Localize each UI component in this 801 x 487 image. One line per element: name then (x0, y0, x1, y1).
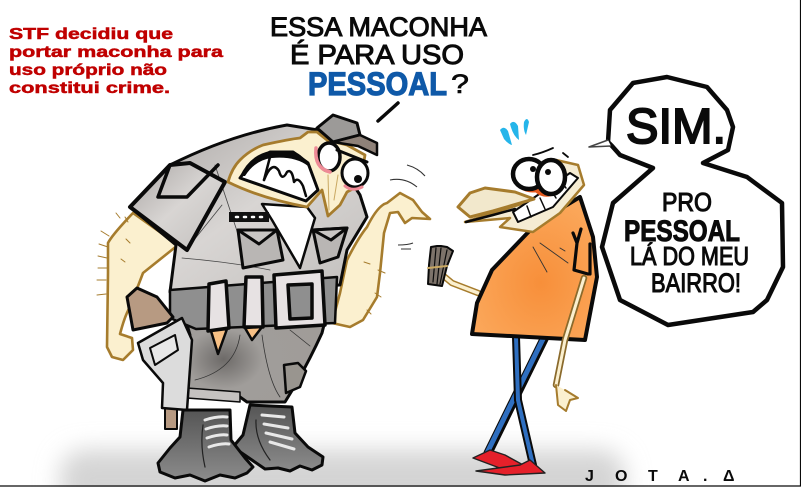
officer shirt (130, 125, 367, 292)
bundle of joints (428, 246, 453, 286)
right arm (556, 278, 584, 411)
officer right arm and pointing hand (332, 193, 430, 327)
caption: red headline: constitui crime. (9, 80, 170, 97)
speech bubble: answer (589, 77, 783, 325)
caption: red headline: STF decidiu que (9, 26, 173, 43)
speech: officer question: ESSA MACONHA (270, 12, 487, 42)
motion lines (390, 165, 425, 249)
caption: red headline: uso próprio não (9, 62, 167, 79)
bubble text: PESSOAL (624, 215, 740, 248)
name tag (229, 212, 269, 222)
speech: officer question: ? (451, 69, 469, 99)
left arm holding joints (434, 268, 478, 293)
chest: white collar (262, 204, 315, 268)
bubble text: SIM. (626, 100, 726, 154)
shirt sleeve (573, 229, 590, 274)
open mouth (240, 152, 318, 201)
beard strands (328, 175, 338, 210)
officer left arm (97, 213, 178, 360)
officer head (228, 115, 377, 216)
speech tick (378, 103, 398, 121)
legs (487, 337, 545, 465)
head with grin (458, 148, 584, 232)
officer figure (97, 115, 430, 481)
signature: JOTA.Δ (585, 468, 734, 485)
belt (170, 277, 337, 329)
caption: red headline (9, 26, 223, 97)
bubble text: BAIRRO! (651, 268, 741, 298)
officer shorts (176, 280, 335, 402)
man with orange shirt (428, 119, 597, 475)
caption: red headline: portar maconha para (9, 44, 223, 61)
ground shadow (60, 450, 625, 487)
bubble text: LÁ DO MEU (630, 241, 749, 271)
belt pouches (208, 271, 325, 354)
sweat drops (500, 119, 529, 145)
eyes (318, 143, 340, 171)
holster and gun (127, 288, 192, 429)
orange shirt (472, 197, 597, 340)
cap (317, 115, 360, 142)
boots (158, 405, 323, 481)
speech: officer question (270, 12, 487, 102)
shirt pockets (238, 228, 347, 268)
speech: officer question: PESSOAL (308, 66, 447, 102)
bubble text (624, 100, 749, 298)
shirt sleeve (130, 163, 225, 250)
speech: officer question: É PARA USO (290, 39, 464, 70)
bubble text: PRO (662, 187, 712, 217)
red shoes (473, 450, 545, 475)
